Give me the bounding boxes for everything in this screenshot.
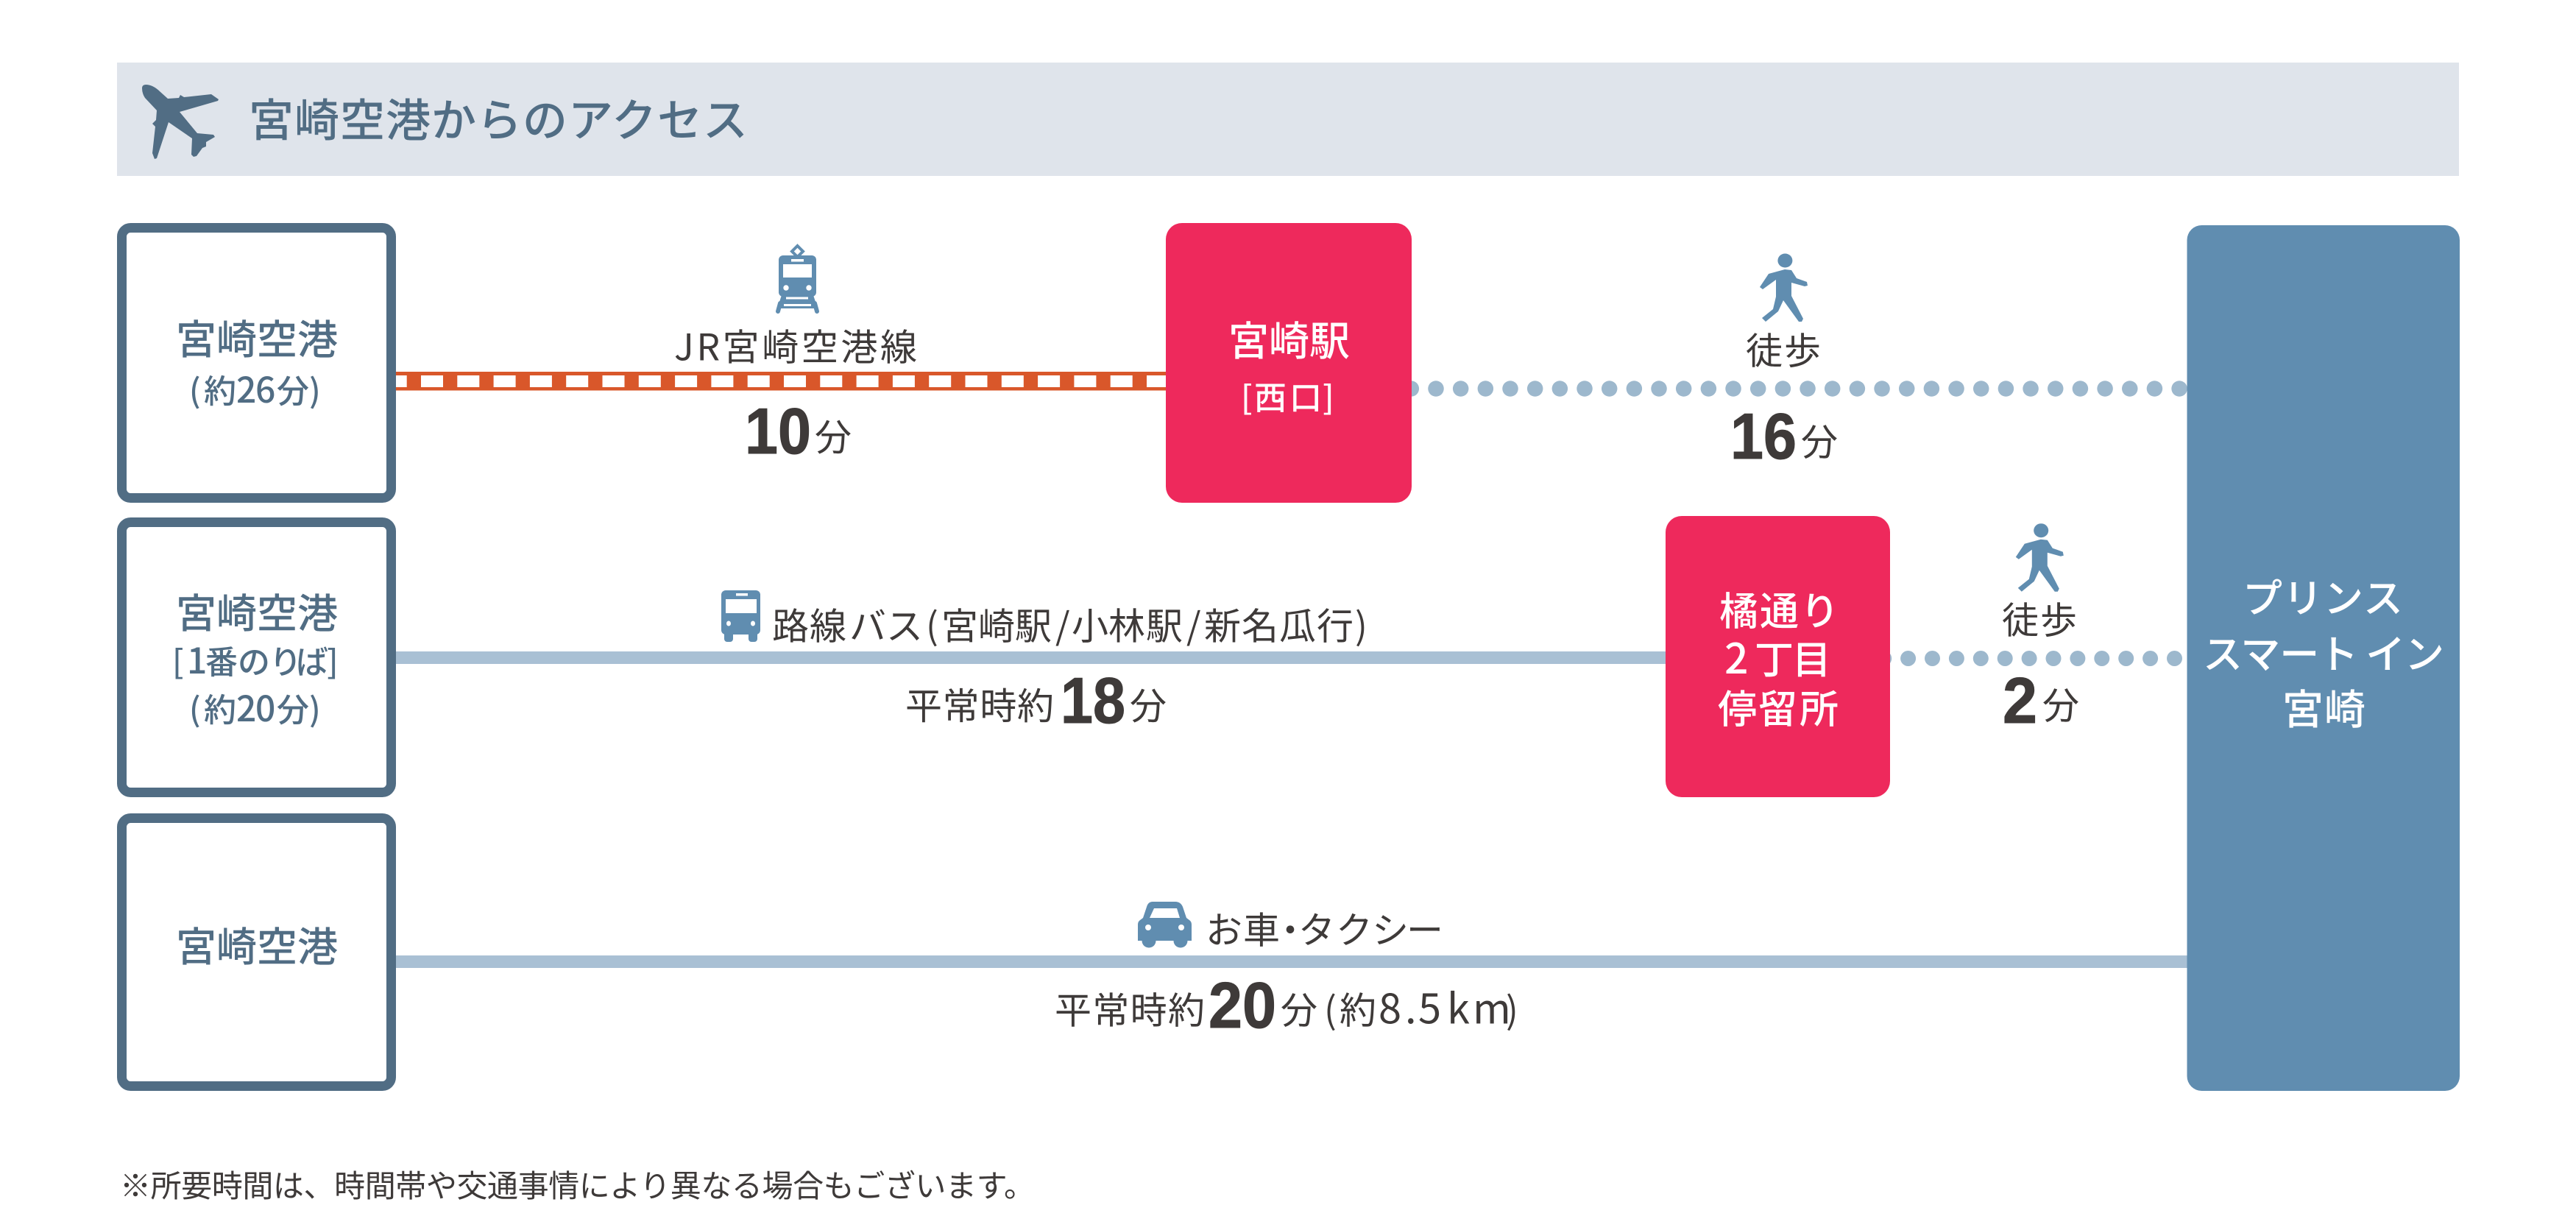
icon: car — [1138, 902, 1192, 948]
icon: train — [777, 246, 818, 311]
route line: walk from bus stop — [1884, 651, 2176, 666]
duration: 16 minutes — [1730, 400, 1838, 473]
panel: Prince Smart Inn Miyazaki: スマート イン — [2203, 622, 2444, 680]
panel: Tachibana-dori 2-chome bus stop: 2丁目 — [1724, 626, 1831, 686]
origin duration: (約26分) — [189, 361, 321, 413]
duration: 20 minutes, about 8.5 km: 分 — [1281, 982, 1317, 1035]
bus stop name: 橘通り — [1719, 581, 1839, 637]
duration: 16 minutes: 16 — [1730, 400, 1797, 473]
panel: Miyazaki Airport train origin — [122, 228, 392, 498]
route line: walk from Miyazaki station — [1411, 381, 2181, 397]
origin duration: (約20分) — [189, 680, 321, 732]
label: on foot: 徒歩 — [2002, 592, 2077, 645]
duration: 10 minutes: 分 — [815, 409, 852, 462]
panel: Tachibana-dori 2-chome bus stop: 停留所 — [1718, 679, 1839, 735]
duration: 18 minutes on weekdays — [905, 664, 1167, 737]
title: 宮崎空港からのアクセス — [249, 84, 748, 149]
header band — [117, 63, 2459, 176]
footnote: ※所要時間は、時間帯や交通事情により異なる場合もございます。 — [120, 1162, 1035, 1206]
hotel name: プリンス — [2243, 566, 2403, 624]
duration: 16 minutes: 分 — [1801, 414, 1838, 467]
label: JR Miyazaki Airport Line: JR宮崎空港線 — [674, 318, 917, 371]
panel: Miyazaki Station — [1166, 223, 1412, 503]
station exit: [西口] — [1241, 372, 1334, 419]
origin name: 宮崎空港 — [176, 307, 338, 366]
label: on foot: 徒歩 — [1746, 322, 1821, 375]
route line: JR train — [396, 372, 1167, 390]
duration: 10 minutes: 10 — [745, 395, 811, 467]
duration: 18 minutes on weekdays: 18 — [1061, 664, 1125, 737]
duration: 20 minutes, about 8.5 km: 平常時約 — [1055, 982, 1205, 1035]
panel: Tachibana-dori 2-chome bus stop — [1666, 516, 1890, 797]
origin name: 宮崎空港 — [176, 581, 338, 640]
label: route bus: 路線バス(宮崎駅/小林駅/新名瓜行) — [772, 598, 1367, 651]
duration: 18 minutes on weekdays: 平常時約 — [905, 677, 1054, 730]
panel: Prince Smart Inn Miyazaki — [2187, 225, 2460, 1091]
duration: 20 minutes, about 8.5 km: (約8.5km) — [1324, 976, 1518, 1036]
route line: bus — [396, 651, 1666, 664]
route line: car and taxi — [396, 955, 2187, 968]
duration: 2 minutes: 2 — [2003, 664, 2037, 737]
duration: 20 minutes, about 8.5 km — [1055, 969, 1518, 1042]
panel: Miyazaki Airport car origin — [122, 819, 392, 1086]
duration: 10 minutes — [745, 395, 852, 467]
icon: walking person — [2016, 523, 2064, 592]
panel: Miyazaki Airport bus origin — [122, 523, 392, 792]
duration: 2 minutes: 分 — [2042, 677, 2079, 730]
panel: Prince Smart Inn Miyazaki: 宮崎 — [2282, 677, 2366, 737]
icon: walking person — [1760, 253, 1808, 322]
boarding place: [1番のりば] — [172, 632, 339, 684]
duration: 20 minutes, about 8.5 km: 20 — [1209, 969, 1276, 1042]
icon: bus — [721, 590, 760, 642]
duration: 18 minutes on weekdays: 分 — [1130, 677, 1167, 730]
label: car and taxi: お車・タクシー — [1206, 901, 1443, 954]
duration: 2 minutes — [2003, 664, 2079, 737]
origin name: 宮崎空港 — [176, 914, 338, 973]
icon: airplane — [142, 85, 219, 159]
station name: 宮崎駅 — [1228, 308, 1350, 367]
